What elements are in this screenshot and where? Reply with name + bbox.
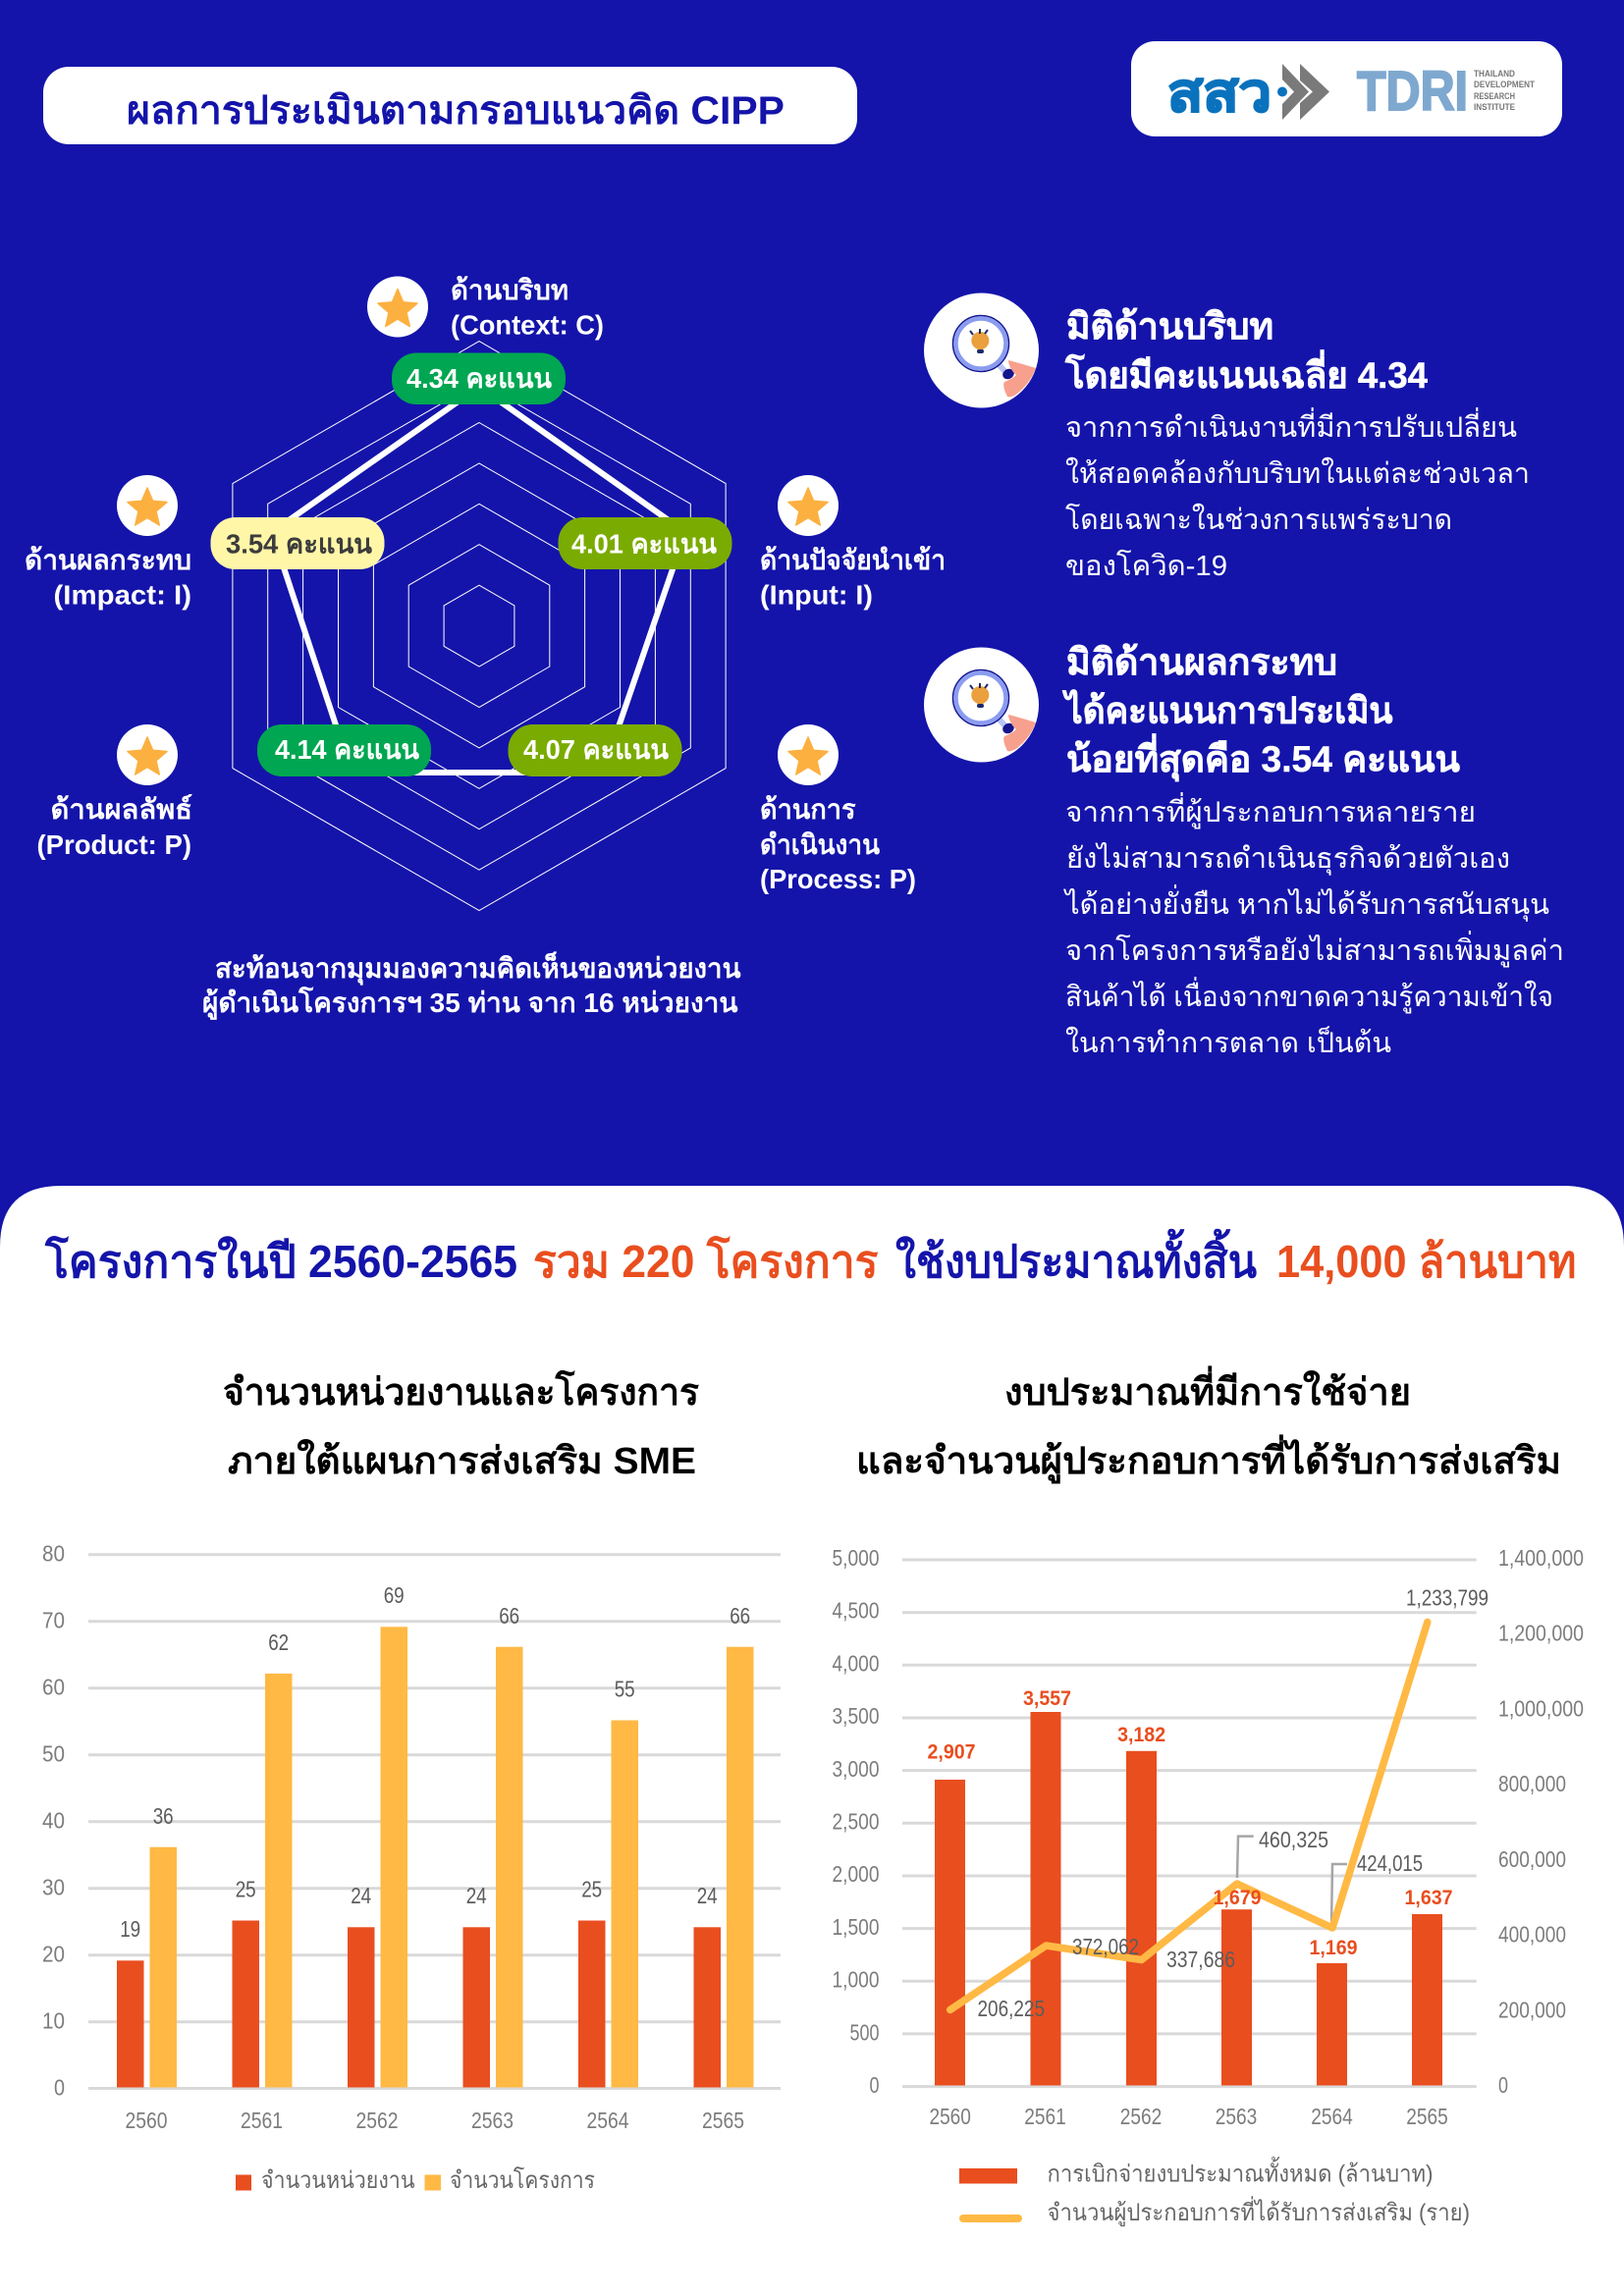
value labels: 24 (466, 1883, 487, 1908)
chart title: right: งบประมาณที่มีการใช้จ่าย (1004, 1365, 1411, 1414)
value labels: 69 (384, 1582, 405, 1608)
score: product (257, 724, 431, 776)
right axis labels: 800,000 (1498, 1771, 1566, 1796)
score: input (558, 517, 732, 569)
score: input: 4.01 คะแนน (571, 528, 717, 560)
logo: OSMEP: สสว (1167, 64, 1272, 123)
label: product (37, 794, 192, 860)
chart title: left: ภายใต้แผนการส่งเสริม SME (228, 1439, 696, 1482)
y axis labels: 20 (42, 1942, 65, 1967)
x axis labels: 2562 (355, 2108, 399, 2133)
legend: จำนวนผู้ประกอบการที่ได้รับการส่งเสริม (ราย) (1047, 2196, 1470, 2227)
x axis labels (929, 2104, 1448, 2129)
label: process (760, 794, 916, 894)
headline (44, 1228, 1577, 1287)
chart title: right (856, 1365, 1561, 1484)
headline: ใช้งบประมาณทั้งสิ้น (895, 1228, 1258, 1287)
x axis labels: 2564 (587, 2108, 629, 2133)
y axis labels: 80 (42, 1541, 65, 1567)
heading: impact dimension: มิติด้านผลกระทบ (1066, 642, 1337, 682)
value labels: 66 (730, 1603, 750, 1629)
left axis labels: 1,000 (833, 1967, 880, 1993)
label: process: ด้านการ (760, 794, 856, 825)
caption: สะท้อนจากมุมมองความคิดเห็นของหน่วยงาน (215, 951, 740, 986)
right axis labels: 400,000 (1498, 1922, 1566, 1948)
text: impact dimension: ได้อย่างยั่งยืน หากไม่ได้รับการสนับสนุน (1063, 884, 1549, 922)
text: impact dimension: ในการทำการตลาด เป็นต้น (1065, 1025, 1391, 1059)
x axis labels: 2563 (471, 2108, 514, 2133)
right axis labels: 200,000 (1498, 1997, 1566, 2022)
left axis labels: 2,000 (833, 1861, 880, 1887)
logo: OSMEP (1167, 64, 1329, 123)
caption: ผู้ดำเนินโครงการฯ 35 ท่าน จาก 16 หน่วยงาน (202, 986, 738, 1020)
left axis labels: 2,500 (833, 1808, 880, 1834)
red bars (117, 1920, 721, 2087)
budget bars (935, 1712, 1442, 2085)
entrepreneur value labels: 460,325 (1259, 1827, 1328, 1852)
entrepreneur value labels: 337,686 (1166, 1947, 1235, 1972)
right axis labels (1498, 1545, 1584, 2098)
x axis labels: 2560 (929, 2104, 971, 2129)
headline: โครงการในปี 2560-2565 (44, 1235, 517, 1287)
x axis labels: 2561 (241, 2108, 283, 2133)
y axis labels: 60 (42, 1675, 65, 1700)
text: context dimension: โดยเฉพาะในช่วงการแพร่ระบาด (1065, 503, 1452, 536)
radar chart (210, 342, 732, 911)
value labels: 24 (697, 1883, 718, 1908)
left axis labels: 0 (870, 2072, 880, 2098)
value labels: 36 (153, 1803, 174, 1829)
panel: white lower section (0, 1186, 1624, 2296)
radar data polygon (272, 387, 685, 773)
score: product: 4.14 คะแนน (275, 734, 419, 765)
left axis labels (833, 1545, 880, 2098)
text: impact dimension: จากโครงการหรือยังไม่สามารถเพิ่มมูลค่า (1065, 931, 1564, 968)
icon: star impact (117, 475, 178, 536)
x axis labels: 2565 (1406, 2104, 1448, 2129)
x axis labels: 2560 (126, 2108, 167, 2133)
label: process: (Process: P) (760, 864, 916, 894)
chart title: right: และจำนวนผู้ประกอบการที่ได้รับการส่งเสริม (856, 1434, 1561, 1484)
combo chart: budget and entrepreneurs (833, 1545, 1584, 2227)
value labels: 25 (236, 1877, 256, 1902)
legend: การเบิกจ่ายงบประมาณทั้งหมด (ล้านบาท) (1047, 2156, 1434, 2187)
logo: TDRI: THAILAND (1474, 69, 1515, 79)
score: process: 4.07 คะแนน (523, 734, 669, 765)
text: impact dimension (1063, 792, 1564, 1059)
x axis labels: 2564 (1311, 2104, 1353, 2129)
left axis labels: 3,500 (833, 1703, 880, 1729)
headline: รวม 220 โครงการ (533, 1235, 879, 1287)
label: impact: ด้านผลกระทบ (25, 545, 191, 575)
legend: จำนวนโครงการ (450, 2166, 595, 2194)
right axis labels: 1,000,000 (1498, 1695, 1584, 1721)
score: context: 4.34 คะแนน (406, 363, 552, 394)
value labels: 24 (351, 1883, 371, 1908)
y axis labels: 10 (42, 2008, 65, 2034)
heading: impact dimension: ได้คะแนนการประเมิน (1061, 689, 1392, 730)
entrepreneur value labels (978, 1584, 1489, 2021)
budget value labels: 1,679 (1214, 1887, 1261, 1909)
label: input: ด้านปัจจัยนำเข้า (760, 545, 946, 575)
left axis labels: 1,500 (833, 1914, 880, 1940)
legend (959, 2156, 1470, 2227)
icon: star process (778, 724, 839, 785)
budget value labels: 3,557 (1023, 1687, 1071, 1710)
y axis labels: 70 (42, 1608, 65, 1633)
budget value labels: 1,169 (1310, 1937, 1357, 1959)
label: context (451, 275, 604, 340)
score: impact: 3.54 คะแนน (226, 528, 372, 560)
entrepreneur value labels: 372,062 (1072, 1934, 1139, 1959)
label: input (760, 545, 946, 611)
title: ผลการประเมินตามกรอบแนวคิด CIPP (127, 89, 785, 133)
value labels: 55 (615, 1677, 635, 1702)
value labels (120, 1582, 750, 1942)
heading: context dimension (1064, 306, 1428, 396)
logo: TDRI: RESEARCH (1474, 91, 1515, 101)
logos (1131, 41, 1562, 136)
text: context dimension (1065, 407, 1530, 582)
right axis labels: 600,000 (1498, 1846, 1566, 1872)
right axis labels: 1,200,000 (1498, 1620, 1584, 1645)
left axis labels: 5,000 (833, 1545, 880, 1571)
caption (202, 951, 740, 1020)
text: impact dimension: จากการที่ผู้ประกอบการหลายราย (1065, 792, 1476, 829)
x axis labels (126, 2108, 744, 2133)
chart title: left (223, 1369, 700, 1482)
left axis labels: 3,000 (833, 1756, 880, 1782)
y axis labels: 50 (42, 1741, 65, 1767)
label: input: (Input: I) (760, 579, 873, 611)
heading: context dimension: มิติด้านบริบท (1066, 306, 1273, 347)
icon: star input (778, 475, 839, 536)
y axis labels (42, 1541, 65, 2101)
label: process: ดำเนินงาน (760, 829, 880, 860)
title (43, 67, 857, 144)
right axis labels: 1,400,000 (1498, 1545, 1584, 1571)
text: context dimension: ของโควิด-19 (1065, 549, 1227, 582)
heading: impact dimension: น้อยที่สุดคือ 3.54 คะแนน (1066, 733, 1460, 782)
legend: จำนวนหน่วยงาน (261, 2167, 414, 2194)
right axis labels: 0 (1498, 2072, 1508, 2098)
score: process (509, 724, 681, 776)
value labels: 19 (120, 1916, 140, 1942)
label: context: ด้านบริบท (451, 275, 568, 305)
text: impact dimension: ยังไม่สามารถดำเนินธุรกิจด้วยตัวเอง (1066, 841, 1510, 876)
icon: magnifier 1 (924, 293, 1039, 408)
icon: star context (367, 277, 428, 338)
logo: TDRI: DEVELOPMENT (1474, 80, 1535, 89)
leader lines (1237, 1837, 1347, 1928)
value labels: 66 (499, 1603, 519, 1629)
entrepreneurs line (950, 1622, 1428, 2010)
y axis labels: 30 (42, 1875, 65, 1900)
entrepreneur value labels: 424,015 (1357, 1850, 1423, 1876)
logo: TDRI: INSTITUTE (1474, 102, 1515, 112)
label: context: (Context: C) (451, 310, 604, 340)
label: impact (25, 545, 191, 611)
heading: context dimension: โดยมีคะแนนเฉลี่ย 4.34 (1064, 349, 1428, 396)
label: product: (Product: P) (37, 829, 191, 860)
icon: star product (117, 724, 178, 785)
yellow bars (149, 1627, 754, 2087)
left axis labels: 500 (850, 2019, 880, 2045)
left axis labels: 4,500 (833, 1598, 880, 1624)
x axis labels: 2562 (1120, 2104, 1162, 2129)
score: impact (210, 517, 385, 569)
budget value labels: 2,907 (927, 1741, 976, 1763)
icon: magnifier 2 (924, 648, 1039, 762)
entrepreneur value labels: 1,233,799 (1406, 1584, 1489, 1610)
budget value labels: 3,182 (1117, 1724, 1165, 1746)
budget value labels (927, 1687, 1453, 1959)
value labels: 62 (268, 1629, 289, 1655)
logo: TDRI: TDRI (1357, 60, 1468, 123)
y axis labels: 40 (42, 1808, 65, 1834)
x axis labels: 2563 (1216, 2104, 1257, 2129)
bar chart: agencies and projects (42, 1541, 781, 2194)
left axis labels: 4,000 (833, 1650, 880, 1676)
label: product: ด้านผลลัพธ์ (51, 794, 192, 825)
text: context dimension: จากการดำเนินงานที่มีการปรับเปลี่ยน (1065, 407, 1517, 444)
headline: 14,000 ล้านบาท (1276, 1236, 1577, 1287)
x axis labels: 2565 (702, 2108, 744, 2133)
heading: impact dimension (1061, 642, 1460, 782)
entrepreneur value labels: 206,225 (978, 1996, 1045, 2021)
x axis labels: 2561 (1024, 2104, 1066, 2129)
legend (236, 2166, 595, 2194)
budget value labels: 1,637 (1404, 1887, 1453, 1909)
chart title: left: จำนวนหน่วยงานและโครงการ (223, 1369, 700, 1414)
label: impact: (Impact: I) (53, 579, 191, 611)
y axis labels: 0 (54, 2075, 65, 2101)
text: context dimension: ให้สอดคล้องกับบริบทในแต่ละช่วงเวลา (1065, 456, 1530, 490)
score: context (392, 353, 566, 404)
text: impact dimension: สินค้าได้ เนื่องจากขาดความรู้ความเข้าใจ (1065, 977, 1553, 1014)
value labels: 25 (581, 1877, 602, 1902)
